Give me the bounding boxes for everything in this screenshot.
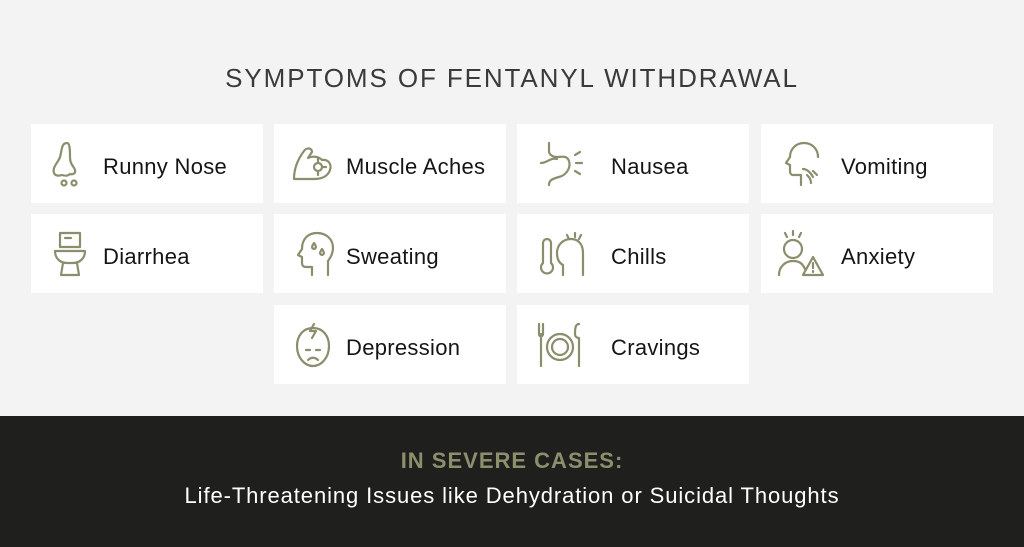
card: muscle aches bbox=[274, 124, 506, 203]
card: anxiety bbox=[761, 214, 993, 293]
card: sweating bbox=[274, 214, 506, 293]
card: chills: Chills bbox=[611, 244, 667, 269]
severe text: Life-Threatening Issues like Dehydration or Suicidal Thoughts bbox=[185, 483, 839, 508]
title: SYMPTOMS OF FENTANYL WITHDRAWAL bbox=[225, 63, 799, 93]
card: cravings bbox=[517, 305, 749, 384]
card: vomiting bbox=[761, 124, 993, 203]
card: depression bbox=[274, 305, 506, 384]
card: anxiety: Anxiety bbox=[841, 244, 915, 269]
card: depression: Depression bbox=[346, 335, 460, 360]
card: cravings: Cravings bbox=[611, 335, 700, 360]
card: muscle aches: Muscle Aches bbox=[346, 154, 485, 179]
bottom band bbox=[0, 416, 1024, 547]
card: diarrhea: Diarrhea bbox=[103, 244, 190, 269]
card: chills bbox=[517, 214, 749, 293]
card: sweating: Sweating bbox=[346, 244, 439, 269]
card: nausea bbox=[517, 124, 749, 203]
card: nausea: Nausea bbox=[611, 154, 689, 179]
card: runny nose bbox=[31, 124, 263, 203]
card: runny nose: Runny Nose bbox=[103, 154, 227, 179]
card: vomiting: Vomiting bbox=[841, 154, 928, 179]
severe heading: IN SEVERE CASES: bbox=[401, 448, 623, 473]
card: diarrhea bbox=[31, 214, 263, 293]
